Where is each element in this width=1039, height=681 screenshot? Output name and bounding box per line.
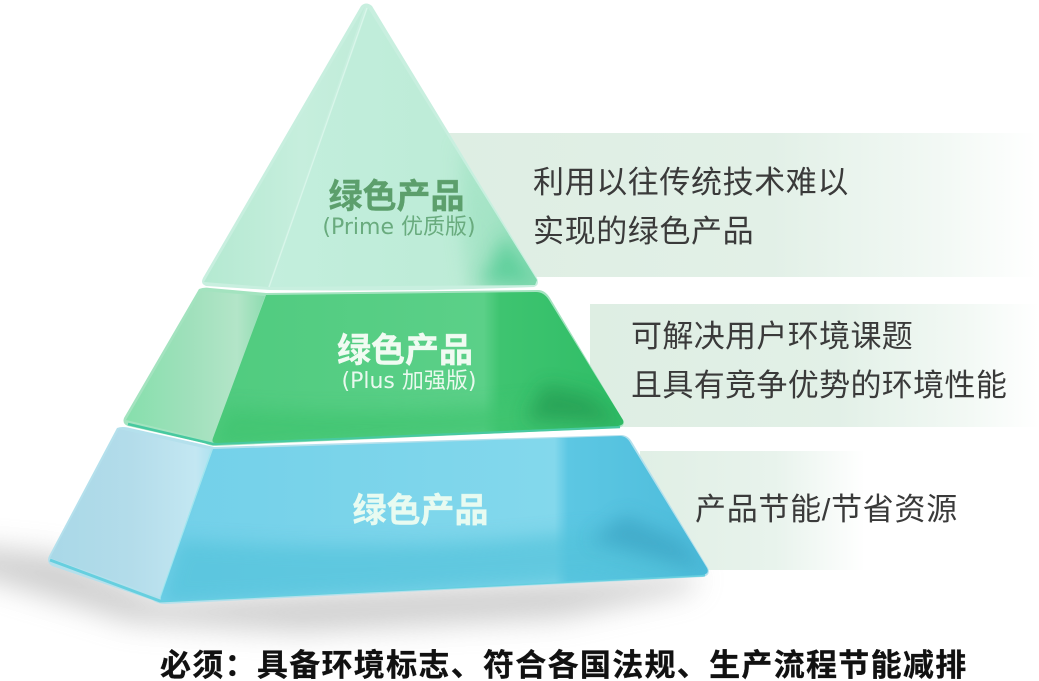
pyramid tier: middle green	[124, 288, 625, 450]
panel: top description band	[447, 133, 1037, 277]
text: top tier description: 实现的绿色产品	[533, 214, 754, 249]
label: middle tier subtitle: (Plus 加强版)	[342, 369, 476, 394]
text: bottom tier description: 产品节能/节省资源	[695, 492, 958, 527]
label: top tier subtitle: (Prime 优质版)	[322, 215, 476, 240]
text: middle tier description: 可解决用户环境课题	[631, 319, 913, 354]
label: middle tier title: 绿色产品	[337, 332, 473, 370]
label: bottom tier title: 绿色产品	[352, 492, 488, 530]
text: middle tier description: 且具有竞争优势的环境性能	[631, 368, 1007, 403]
pyramid tier: bottom blue	[48, 427, 710, 605]
pyramid tier: top mint	[202, 4, 540, 291]
label: top tier title: 绿色产品	[328, 178, 464, 216]
text: middle tier description	[631, 319, 1007, 403]
text: top tier description	[533, 165, 849, 249]
panel: bottom description band	[640, 451, 865, 570]
ground shadow	[0, 545, 700, 632]
panel: middle description band	[590, 304, 1039, 427]
text: top tier description: 利用以往传统技术难以	[533, 165, 849, 200]
